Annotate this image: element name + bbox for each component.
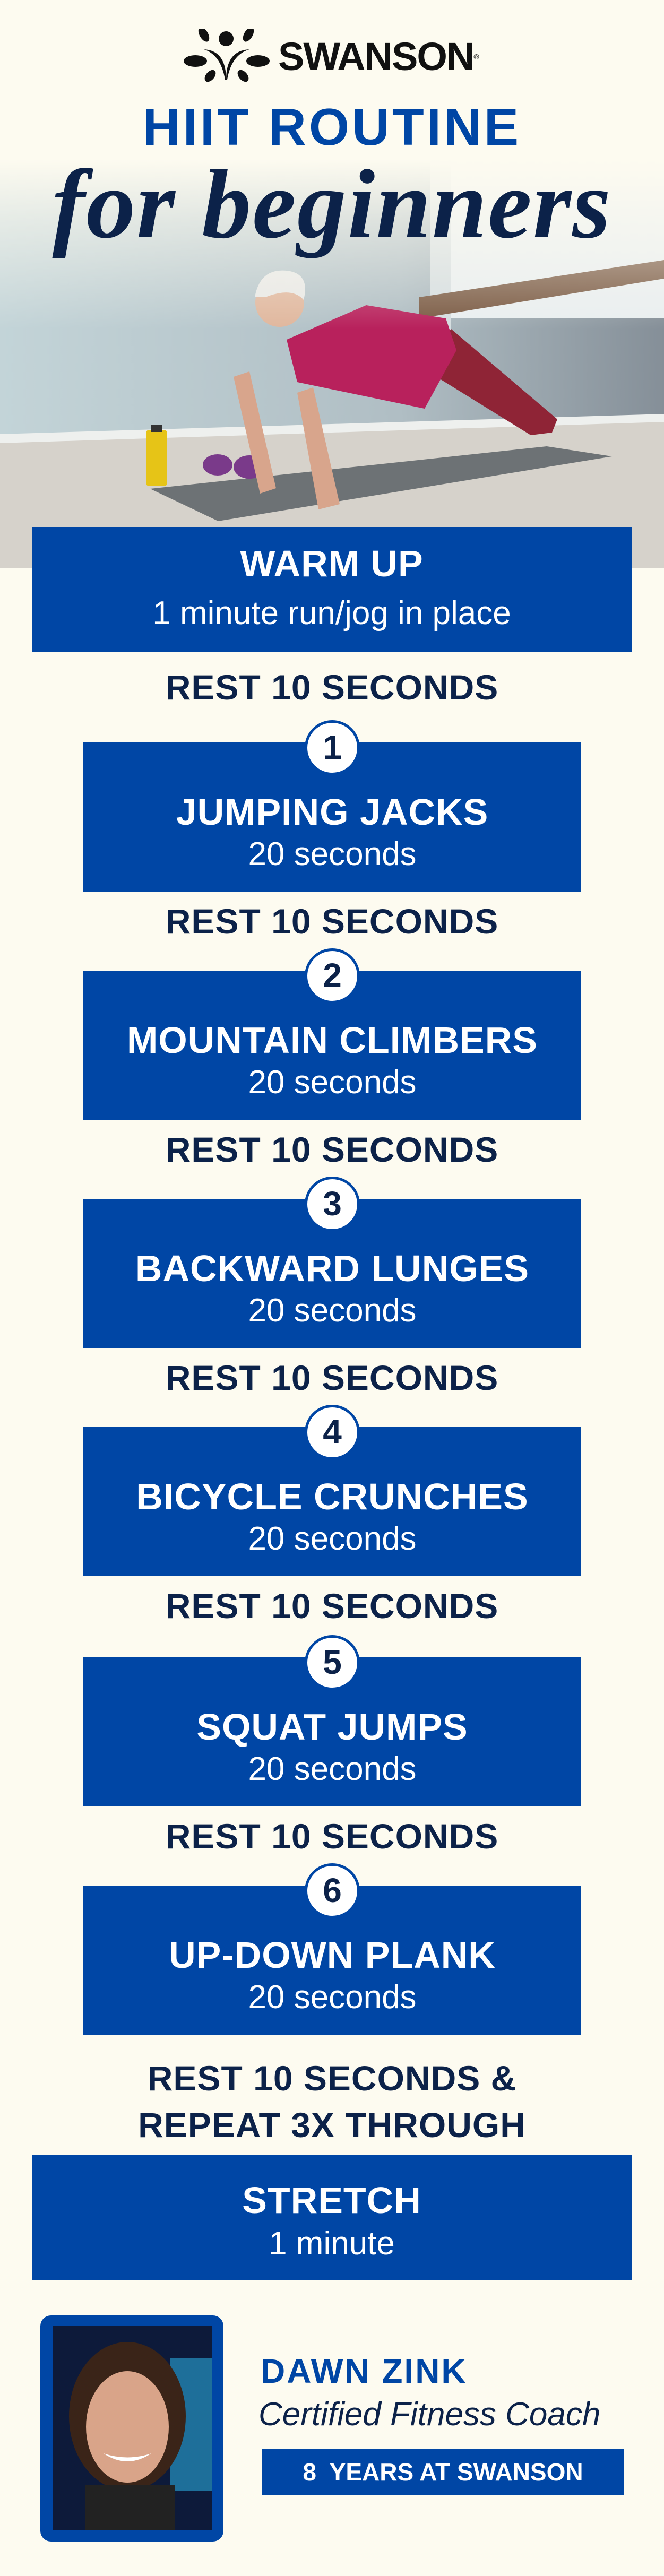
rest and repeat text: REST 10 SECONDS & [148,2059,516,2098]
rest text: REST 10 SECONDS [166,1586,498,1626]
rest and repeat text [138,2059,526,2145]
number badge 3 [305,1177,360,1232]
rest text: REST 10 SECONDS [166,1817,498,1856]
panel: warm up [32,527,632,652]
number badge 1 [305,720,360,775]
panel: stretch [32,2155,632,2280]
rest and repeat text: REPEAT 3X THROUGH [138,2105,526,2145]
rest text: REST 10 SECONDS [166,1130,498,1169]
number badge 5: 5 [323,1643,342,1681]
panel: exercise 4 [83,1405,581,1576]
panel: stretch: STRETCH [242,2180,421,2221]
panel: exercise 4: 20 seconds [248,1520,417,1557]
number badge 3: 3 [323,1185,342,1223]
panel: exercise 2 [83,948,581,1120]
rest text: REST 10 SECONDS [166,668,498,707]
panel: exercise 3: BACKWARD LUNGES [135,1248,529,1289]
number badge 6: 6 [323,1871,342,1909]
coach name: DAWN ZINK [261,2352,468,2390]
panel: exercise 1: JUMPING JACKS [176,791,488,833]
panel: exercise 6: 20 seconds [248,1979,417,2016]
panel: exercise 3: 20 seconds [248,1292,417,1329]
panel: exercise 2: 20 seconds [248,1064,417,1101]
panel: exercise 3 [83,1177,581,1348]
number badge 6 [305,1863,360,1918]
badge: years at swanson [262,2449,624,2495]
number badge 4 [305,1405,360,1460]
number badge 2 [305,948,360,1004]
number badge 1: 1 [323,728,342,766]
panel: exercise 6 [83,1863,581,2035]
subtitle: for beginners: for beginners [52,150,612,259]
panel: exercise 5 [83,1635,581,1806]
panel: warm up: 1 minute run/jog in place [152,595,511,632]
panel: warm up: WARM UP [240,543,424,584]
panel: exercise 1: 20 seconds [248,836,417,872]
number badge 2: 2 [323,956,342,995]
panel: exercise 2: MOUNTAIN CLIMBERS [127,1019,538,1061]
icon: swanson leaves [184,29,270,82]
badge: years at swanson: 8 YEARS AT SWANSON [303,2458,583,2486]
rest text: REST 10 SECONDS [166,1358,498,1397]
coach photo [40,2315,223,2542]
number badge 4: 4 [323,1413,342,1451]
panel: exercise 1 [83,720,581,892]
hero photo: woman doing plank [0,174,664,568]
logo text: SWANSON® [278,34,478,79]
panel: exercise 4: BICYCLE CRUNCHES [136,1476,529,1517]
panel: stretch: 1 minute [269,2225,395,2262]
rest text: REST 10 SECONDS [166,902,498,941]
number badge 5 [305,1635,360,1690]
panel: exercise 5: SQUAT JUMPS [196,1706,468,1748]
title: HIIT ROUTINE: HIIT ROUTINE [143,98,521,156]
panel: exercise 6: UP-DOWN PLANK [169,1934,496,1976]
logo: Swanson [184,29,479,82]
panel: exercise 5: 20 seconds [248,1751,417,1787]
coach title: Certified Fitness Coach [258,2396,600,2433]
